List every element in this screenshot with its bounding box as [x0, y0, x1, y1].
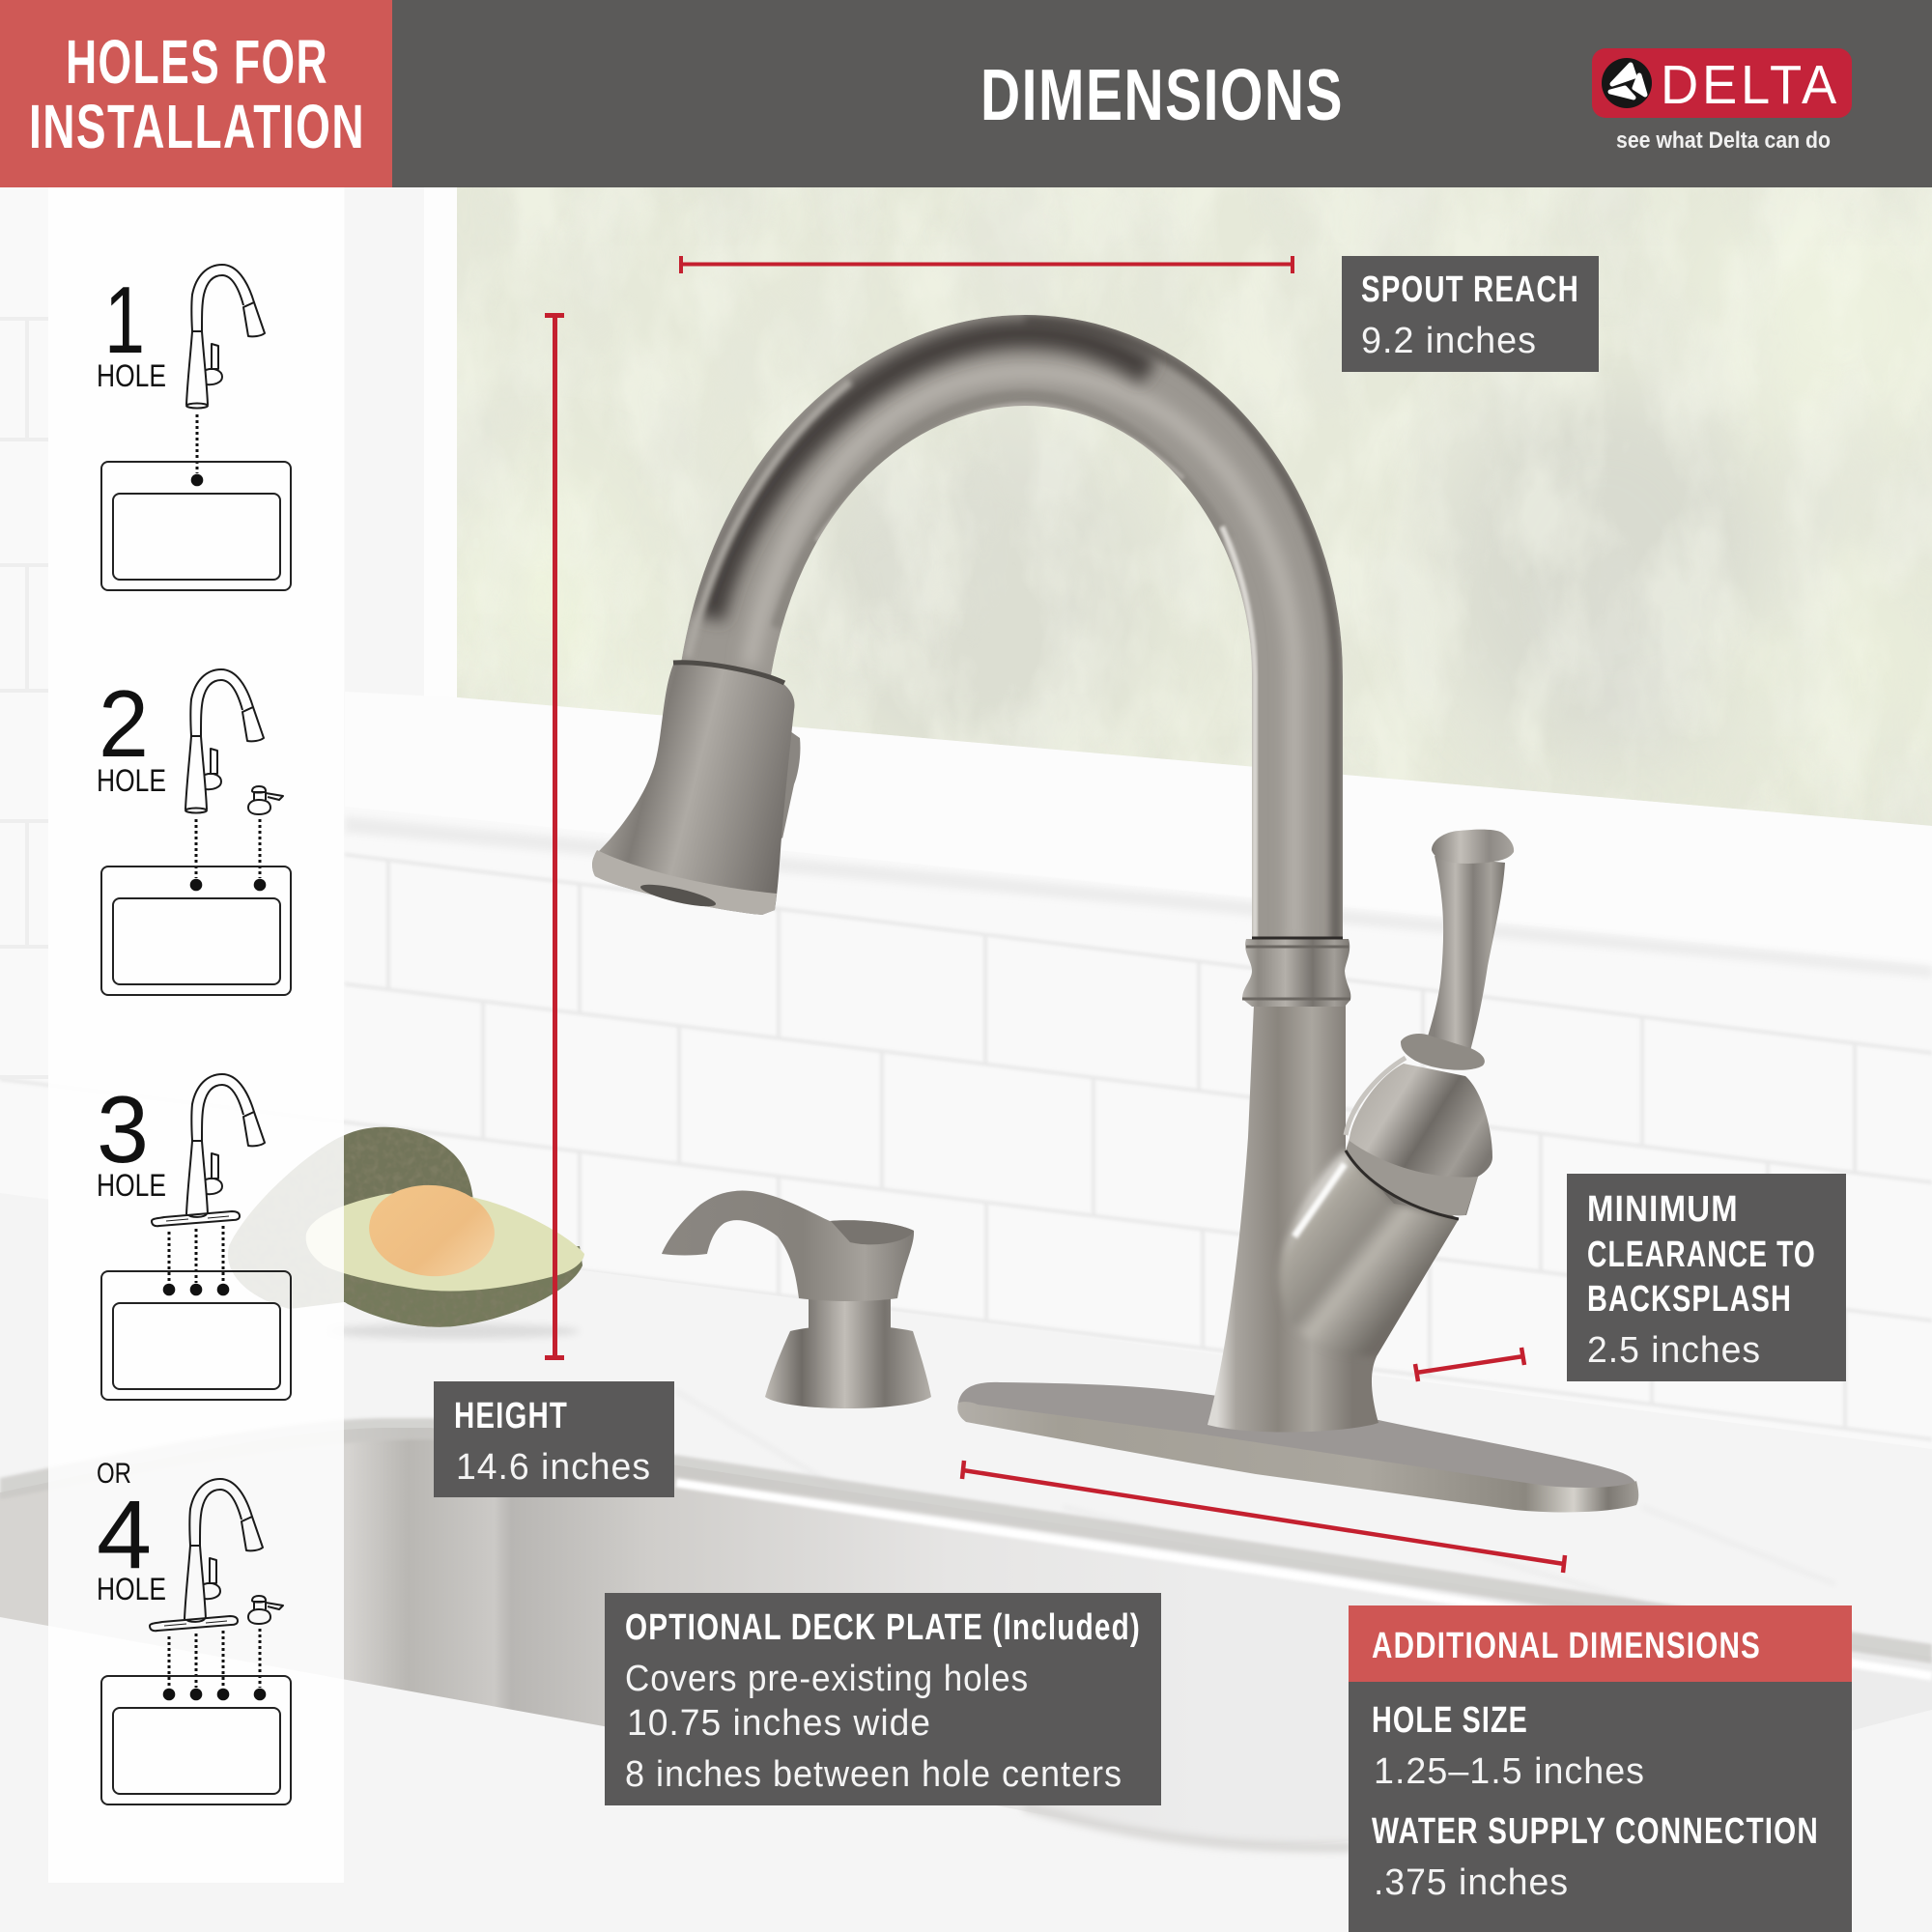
window view of blurred greenery: [454, 184, 1932, 840]
callout: minimum clearance: CLEARANCE TO: [1587, 1235, 1816, 1275]
panel: additional dimensions: 1.25–1.5 inches: [1374, 1751, 1645, 1792]
tile backsplash: [0, 811, 1932, 1439]
numeral 2: 2: [99, 670, 149, 777]
numeral 3: 3: [97, 1076, 149, 1182]
icon: faucet outline with plate: [150, 1479, 263, 1631]
label hole: HOLE: [97, 763, 166, 798]
panel: additional dimensions: .375 inches: [1374, 1862, 1569, 1903]
deck plate top face: [958, 1382, 1637, 1492]
spout arc: [688, 322, 1336, 947]
faucet: [592, 322, 1638, 1512]
install option: or 4 hole: [97, 1458, 291, 1804]
header bar: [0, 0, 1932, 187]
dotted connectors: [169, 1629, 260, 1688]
icon: sink: [101, 867, 291, 995]
window frame: [345, 187, 424, 786]
dispenser base: [765, 1325, 931, 1408]
panel: additional dimensions: ADDITIONAL DIMENSIONS: [1372, 1626, 1761, 1666]
install option: 3 hole: [97, 1074, 291, 1400]
dimension line: height: [545, 315, 564, 1358]
icon: sink: [101, 1271, 291, 1400]
dispenser neck: [809, 1294, 891, 1337]
callout: minimum clearance: BACKSPLASH: [1587, 1279, 1792, 1320]
callout: height: 14.6 inches: [456, 1447, 651, 1488]
callout: spout reach: [1342, 256, 1599, 372]
dotted connectors: [196, 819, 260, 878]
dimension line: deck plate: [962, 1461, 1565, 1573]
logo: Delta: DELTA: [1661, 54, 1840, 116]
valve dome: [1346, 1064, 1492, 1215]
marble countertop: [0, 1193, 1932, 1700]
dispenser spout and pump head: [662, 1190, 914, 1301]
lever handle: [1427, 856, 1505, 1052]
soap dispenser: [662, 1190, 931, 1408]
icon: faucet outline: [186, 265, 265, 408]
avocado half skin: [306, 1234, 582, 1327]
callout: minimum clearance: 2.5 inches: [1587, 1330, 1761, 1371]
whole avocado: [228, 1127, 473, 1309]
numeral 1: 1: [104, 267, 145, 373]
valve highlight: [1294, 1164, 1345, 1236]
lever knob: [1432, 830, 1514, 864]
dotted connector: [195, 414, 199, 473]
logo: Delta: [1592, 48, 1852, 154]
icon: soap dispenser outline: [248, 1596, 283, 1624]
dotted connectors: [169, 1226, 223, 1283]
panel: holes for installation heading: [0, 0, 392, 187]
icon: soap dispenser outline: [248, 786, 283, 814]
shadow under avocado half: [328, 1323, 580, 1339]
numeral 4: 4: [97, 1481, 152, 1589]
header background: [392, 0, 1932, 187]
spray head trigger: [773, 724, 800, 838]
panel: holes for installation heading: INSTALLATION: [29, 92, 365, 161]
dimension line: spout reach: [681, 256, 1293, 273]
lever collar: [1401, 1034, 1485, 1070]
callout: optional deck plate: [605, 1593, 1161, 1805]
spray head: [592, 665, 794, 915]
window sill: [345, 692, 1932, 966]
deck plate front edge: [957, 1402, 1638, 1512]
lower faucet body: [1208, 1005, 1459, 1433]
panel: sidebar translucent backdrop: [48, 187, 344, 1883]
callout: minimum clearance: [1567, 1174, 1846, 1381]
callout: optional deck plate: OPTIONAL DECK PLATE (Included): [625, 1607, 1141, 1648]
label hole: HOLE: [97, 1572, 166, 1606]
avocado flesh: [306, 1192, 584, 1292]
icon: faucet outline: [185, 669, 264, 813]
label or: OR: [97, 1458, 131, 1490]
avocados: [228, 1127, 584, 1339]
dimension line: backsplash clearance: [1415, 1348, 1524, 1381]
logo: Delta: see what Delta can do: [1616, 128, 1831, 154]
callout: optional deck plate: 8 inches between hole centers: [625, 1754, 1122, 1795]
callout: optional deck plate: Covers pre-existing holes: [625, 1659, 1029, 1699]
panel: additional dimensions: [1349, 1605, 1852, 1932]
callout: spout reach: 9.2 inches: [1361, 321, 1537, 361]
icon: sink: [101, 462, 291, 590]
install option: 1 hole: [97, 265, 291, 590]
title: DIMENSIONS: [980, 54, 1344, 135]
panel: additional dimensions: WATER SUPPLY CONNECTION: [1372, 1811, 1819, 1852]
label hole: HOLE: [97, 1168, 166, 1203]
icon: sink: [101, 1676, 291, 1804]
panel: additional dimensions: HOLE SIZE: [1372, 1700, 1528, 1741]
callout: optional deck plate: 10.75 inches wide: [627, 1703, 931, 1744]
label hole: HOLE: [97, 358, 166, 393]
install option: 2 hole: [97, 669, 291, 995]
diagonal valve body: [1280, 1151, 1463, 1356]
callout: spout reach: SPOUT REACH: [1361, 270, 1579, 310]
sink basin: [0, 1428, 1932, 1932]
callout: height: HEIGHT: [454, 1396, 568, 1436]
callout: minimum clearance: MINIMUM: [1587, 1189, 1739, 1230]
collar: [1242, 939, 1350, 1007]
avocado pit: [365, 1180, 498, 1281]
panel: holes for installation heading: HOLES FOR: [66, 27, 328, 97]
spray nozzle: [639, 880, 718, 911]
callout: height: [434, 1381, 674, 1497]
foreground countertop: [0, 1617, 1932, 1932]
icon: faucet outline with plate: [152, 1074, 265, 1226]
